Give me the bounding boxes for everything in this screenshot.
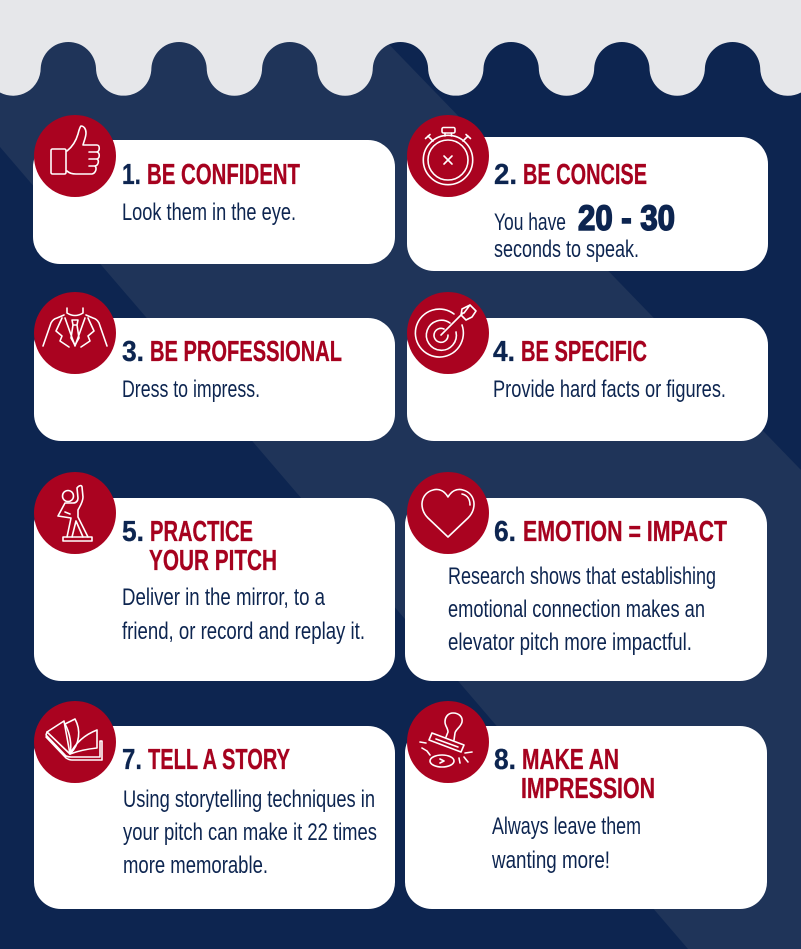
panel: 4 be specific [407,292,768,441]
text [491,813,641,874]
text: Research shows that establishing [448,563,716,590]
text: Dress to impress. [122,376,260,403]
heading: 3. [122,336,144,368]
text: elevator pitch more impactful. [448,629,692,656]
text: seconds to speak. [494,236,639,263]
heading: 6. [494,516,516,548]
heading [122,159,300,191]
text: 20 - 30 [578,199,675,238]
panel: 5 practice your pitch [34,472,395,681]
heading: 5. [122,516,144,548]
heading [122,516,277,577]
heading: MAKE AN [522,744,619,776]
text: friend, or record and replay it. [122,618,365,645]
text: Provide hard facts or figures. [493,376,726,403]
icon: figure at mirror [34,472,116,554]
heading: 8. [494,744,516,776]
heading [122,744,290,776]
heading: BE CONFIDENT [147,159,300,191]
heading: IMPRESSION [521,773,655,805]
heading: EMOTION = IMPACT [523,516,727,548]
heading [122,336,342,368]
text: Deliver in the mirror, to a [122,584,326,611]
icon: thumbs up [34,115,116,197]
text: Using storytelling techniques in [123,786,375,813]
icon: stamp [407,701,489,783]
text [122,584,365,645]
panel: 3 be professional [34,292,395,441]
heading: BE SPECIFIC [521,336,647,368]
icon: target [407,292,489,374]
panel: 1 be confident [33,115,395,264]
text: Look them in the eye. [122,199,296,226]
text: emotional connection makes an [448,596,705,623]
scalloped top edge [0,0,801,96]
text: more memorable. [123,852,268,879]
text [494,199,675,263]
heading: BE PROFESSIONAL [150,336,342,368]
heading: 4. [493,336,515,368]
panel: 2 be concise [407,115,768,271]
heading: 1. [122,159,141,191]
heading: PRACTICE [150,516,253,548]
icon: stopwatch [407,115,489,197]
heading [494,516,727,548]
heading: 2. [494,159,517,191]
heading [493,336,647,368]
text: wanting more! [491,847,610,874]
icon: open book [34,701,116,783]
heading [494,159,647,191]
text [123,786,377,879]
heading: YOUR PITCH [149,545,277,577]
panel: 7 tell a story [34,701,395,909]
icon: heart [407,472,489,554]
panel: 6 emotion = impact [405,472,767,681]
heading: 7. [122,744,142,776]
text: your pitch can make it 22 times [123,819,377,846]
text: You have [494,209,566,236]
panel: 8 make an impression [405,701,767,909]
icon: suit [34,292,116,374]
text: Always leave them [492,813,641,840]
heading: BE CONCISE [523,159,647,191]
heading [494,744,655,805]
heading: TELL A STORY [148,744,290,776]
text [448,563,716,656]
